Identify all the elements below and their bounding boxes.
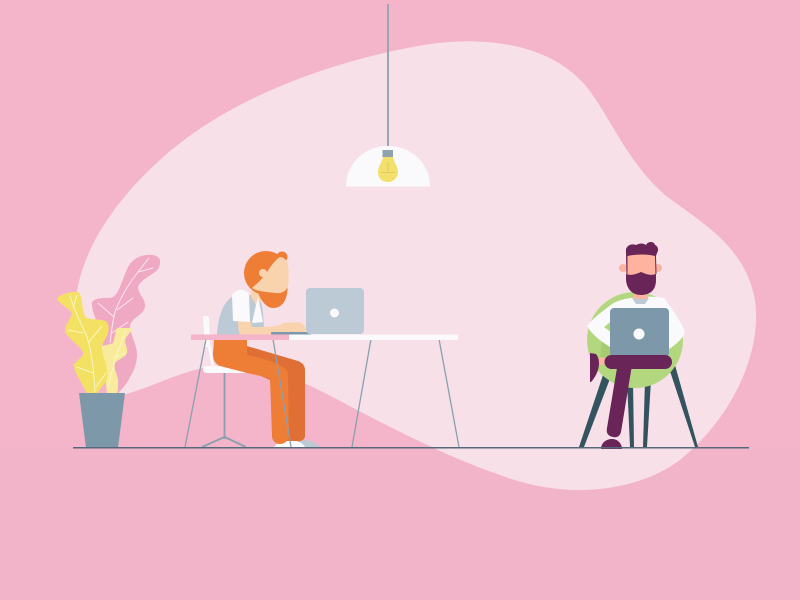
darker chair shade bbox=[600, 320, 620, 358]
lamp cord bbox=[387, 4, 389, 150]
ear bbox=[259, 269, 267, 277]
right ear bbox=[654, 264, 662, 272]
collar bbox=[632, 298, 649, 304]
desk top right bbox=[289, 334, 458, 340]
pale yellow leaf bbox=[102, 328, 132, 393]
laptop bbox=[271, 288, 364, 334]
lower background tint bbox=[0, 448, 800, 600]
neck bbox=[634, 290, 648, 299]
left ear bbox=[619, 264, 627, 272]
yellow leaf bbox=[57, 292, 109, 393]
laptop logo bbox=[330, 308, 339, 318]
hand bbox=[598, 357, 606, 365]
green chair bbox=[587, 292, 683, 388]
desk bbox=[185, 334, 459, 447]
front shoe bbox=[274, 441, 305, 447]
laptop base bbox=[271, 332, 311, 334]
laptop lid bbox=[306, 288, 364, 334]
bulb socket bbox=[382, 150, 393, 157]
lamp shade bbox=[346, 146, 430, 186]
back foot bbox=[590, 353, 599, 382]
hair bun bbox=[276, 252, 288, 262]
shin bbox=[607, 362, 632, 437]
far leg bbox=[247, 346, 305, 442]
plant veins bbox=[68, 295, 126, 392]
chair legs bbox=[579, 365, 698, 447]
arm gap bbox=[604, 320, 613, 333]
pink leaf veins bbox=[98, 258, 153, 343]
torso bbox=[217, 295, 264, 335]
chair seat bbox=[203, 366, 247, 373]
plant bbox=[57, 255, 160, 448]
shoe bbox=[601, 439, 622, 449]
collar piece bbox=[252, 296, 263, 323]
desk top left bbox=[191, 334, 289, 340]
bulb filament bbox=[381, 162, 395, 172]
laptop screen bbox=[610, 308, 669, 357]
plant pot bbox=[79, 393, 125, 448]
floor line bbox=[73, 447, 749, 448]
shirt bbox=[587, 297, 685, 350]
back foot bbox=[298, 440, 320, 447]
pink leaf bbox=[92, 255, 160, 393]
man on chair bbox=[579, 242, 698, 449]
hanging lamp bbox=[346, 4, 430, 186]
light bulb bbox=[378, 157, 398, 182]
chair for woman bbox=[202, 316, 247, 447]
background blob bbox=[76, 41, 756, 490]
arm bbox=[238, 320, 306, 335]
beard bbox=[626, 272, 656, 295]
chair back bbox=[203, 316, 214, 368]
near leg bbox=[213, 340, 289, 444]
sleeve bbox=[232, 290, 250, 322]
neck bbox=[250, 289, 263, 305]
hair back bbox=[258, 281, 287, 308]
thigh bbox=[604, 355, 672, 369]
face bbox=[252, 257, 288, 293]
laptop logo bbox=[634, 328, 644, 340]
face bbox=[626, 252, 656, 280]
chair stand bbox=[202, 373, 246, 447]
hair bbox=[626, 242, 658, 274]
hair bbox=[244, 251, 288, 295]
woman bbox=[213, 251, 320, 447]
desk legs bbox=[185, 339, 459, 447]
